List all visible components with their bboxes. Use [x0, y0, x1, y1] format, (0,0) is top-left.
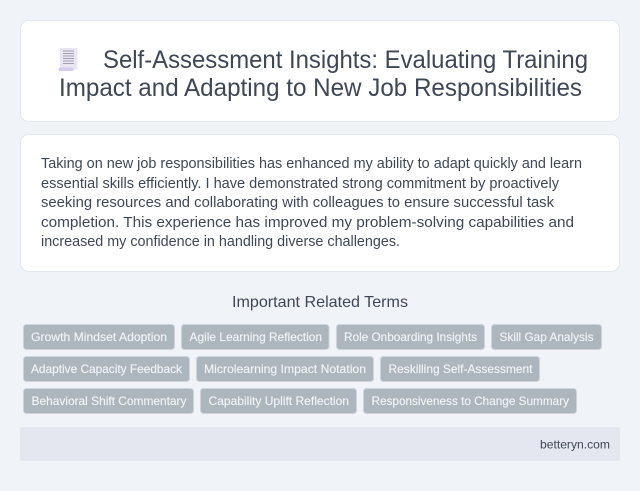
tag: Microlearning Impact Notation: Microlearning Impact Notation [204, 362, 366, 376]
text block: summary [41, 156, 582, 250]
tag: Capability Uplift Reflection: Capability Uplift Reflection [208, 394, 349, 408]
tag: Reskilling Self-Assessment: Reskilling Self-Assessment [388, 362, 533, 376]
panel: summary text [20, 134, 620, 272]
tag: Skill Gap Analysis [492, 324, 602, 350]
tag: Behavioral Shift Commentary [24, 388, 194, 414]
tag: Growth Mindset Adoption [24, 324, 174, 350]
tag: Adaptive Capacity Feedback [24, 356, 190, 382]
tag: Skill Gap Analysis: Skill Gap Analysis [500, 330, 594, 344]
title: Impact and Adapting to New Job Responsibilities [59, 74, 582, 102]
text block: summary: essential skills efficiently. I have demonstrated strong commitment by proactively [41, 176, 560, 192]
text block: summary: completion. This experience has improved my problem-solving capabilities and [41, 215, 574, 231]
footer source label: betteryn.com [540, 438, 610, 452]
icon: document scroll [58, 48, 78, 71]
text block: summary: Taking on new job responsibilities has enhanced my ability to adapt quickly and learn [41, 156, 582, 172]
text block: summary: increased my confidence in handling diverse challenges. [41, 234, 400, 250]
tag: Capability Uplift Reflection [200, 388, 356, 414]
tag: Responsiveness to Change Summary [364, 388, 576, 414]
tag: Role Onboarding Insights [336, 324, 484, 350]
tag: Microlearning Impact Notation [196, 356, 374, 382]
title: Self-Assessment Insights: Evaluating Training [103, 46, 588, 74]
tag: Responsiveness to Change Summary: Responsiveness to Change Summary [372, 394, 569, 408]
tag: Reskilling Self-Assessment [380, 356, 540, 382]
panel: related term tags [24, 324, 602, 414]
text block: summary: seeking resources and collaborating with colleagues to ensure successful task [41, 195, 555, 211]
tag: Role Onboarding Insights: Role Onboarding Insights [344, 330, 477, 344]
title [59, 46, 588, 102]
panel: title card [20, 20, 620, 122]
tag: Agile Learning Reflection: Agile Learning Reflection [190, 330, 322, 344]
tag: Behavioral Shift Commentary: Behavioral Shift Commentary [32, 394, 186, 408]
footer bar [20, 427, 620, 461]
tag: Growth Mindset Adoption: Growth Mindset Adoption [31, 330, 167, 344]
heading: important related terms: Important Related Terms [232, 294, 408, 311]
tag: Adaptive Capacity Feedback: Adaptive Capacity Feedback [31, 362, 183, 376]
tag: Agile Learning Reflection [182, 324, 329, 350]
